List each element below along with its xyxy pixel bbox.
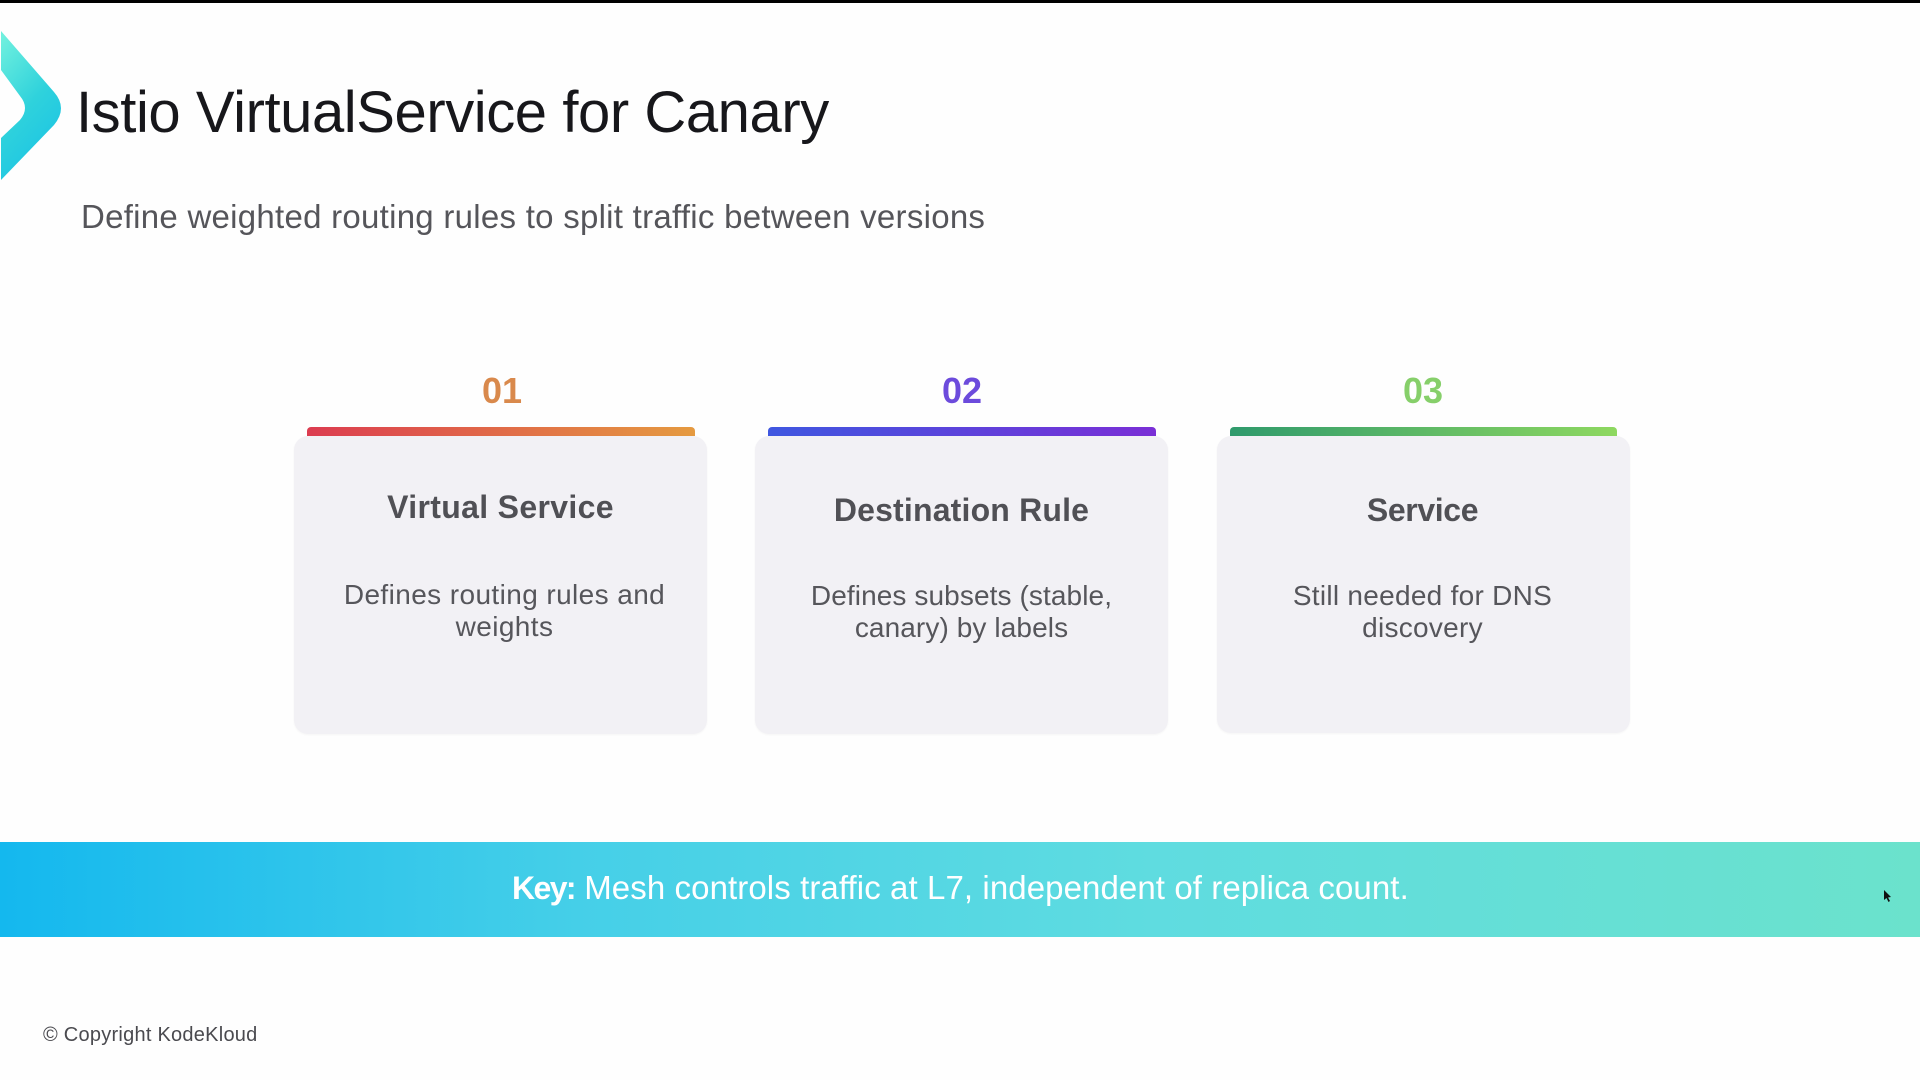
- card body 03: [1217, 436, 1630, 733]
- description 01: [344, 579, 665, 642]
- heading: Destination Rule: Destination Rule: [834, 492, 1089, 528]
- panel: card 02 Destination Rule: [755, 370, 1168, 734]
- key message: Key: Mesh controls traffic at L7, independent of replica count.: [512, 869, 1409, 906]
- number 02: 02: [942, 370, 982, 411]
- description 02: Defines subsets (stable,: [811, 580, 1112, 611]
- accent bar 03: [1230, 427, 1617, 436]
- top black edge: [0, 0, 1920, 3]
- description 02: [811, 580, 1112, 643]
- accent bar 01: [307, 427, 695, 436]
- icon: mouse cursor: [1884, 890, 1891, 902]
- title: Istio VirtualService for Canary: [76, 80, 829, 145]
- number 01: 01: [482, 370, 522, 411]
- description 01: weights: [456, 611, 553, 642]
- card body 02: [755, 436, 1168, 734]
- panel: card 03 Service: [1217, 370, 1630, 733]
- key banner: [0, 842, 1920, 937]
- heading: Virtual Service: Virtual Service: [387, 489, 614, 525]
- accent bar 02: [768, 427, 1156, 436]
- icon: chevron logo: [1, 31, 61, 180]
- subtitle: Define weighted routing rules to split traffic between versions: [81, 198, 985, 235]
- panel: card 01 Virtual Service: [294, 370, 707, 734]
- description 03: Still needed for DNS: [1293, 580, 1552, 611]
- description 01: Defines routing rules and: [344, 579, 665, 610]
- description 03: discovery: [1362, 612, 1483, 643]
- number 03: 03: [1403, 370, 1443, 411]
- description 02: canary) by labels: [855, 612, 1068, 643]
- heading: Service: Service: [1367, 492, 1478, 528]
- description 03: [1293, 580, 1552, 643]
- card body 01: [294, 436, 707, 734]
- copyright: © Copyright KodeKloud: [43, 1024, 258, 1046]
